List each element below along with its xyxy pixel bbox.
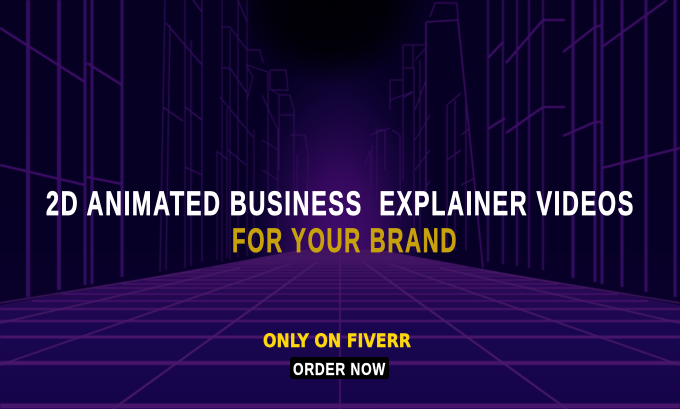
- radial grid lines: [0, 250, 680, 409]
- only on fiverr label: ONLY ON FIVERR: [263, 330, 411, 352]
- horizontal grid lines: [0, 256, 680, 406]
- floor surface: [0, 250, 680, 409]
- right wireframe buildings: [355, 0, 680, 297]
- title line 2: FOR YOUR BRAND: [232, 222, 458, 260]
- neon perspective floor grid: [0, 250, 680, 409]
- left wireframe buildings: [0, 0, 310, 297]
- order now button: ORDER NOW: [293, 359, 386, 379]
